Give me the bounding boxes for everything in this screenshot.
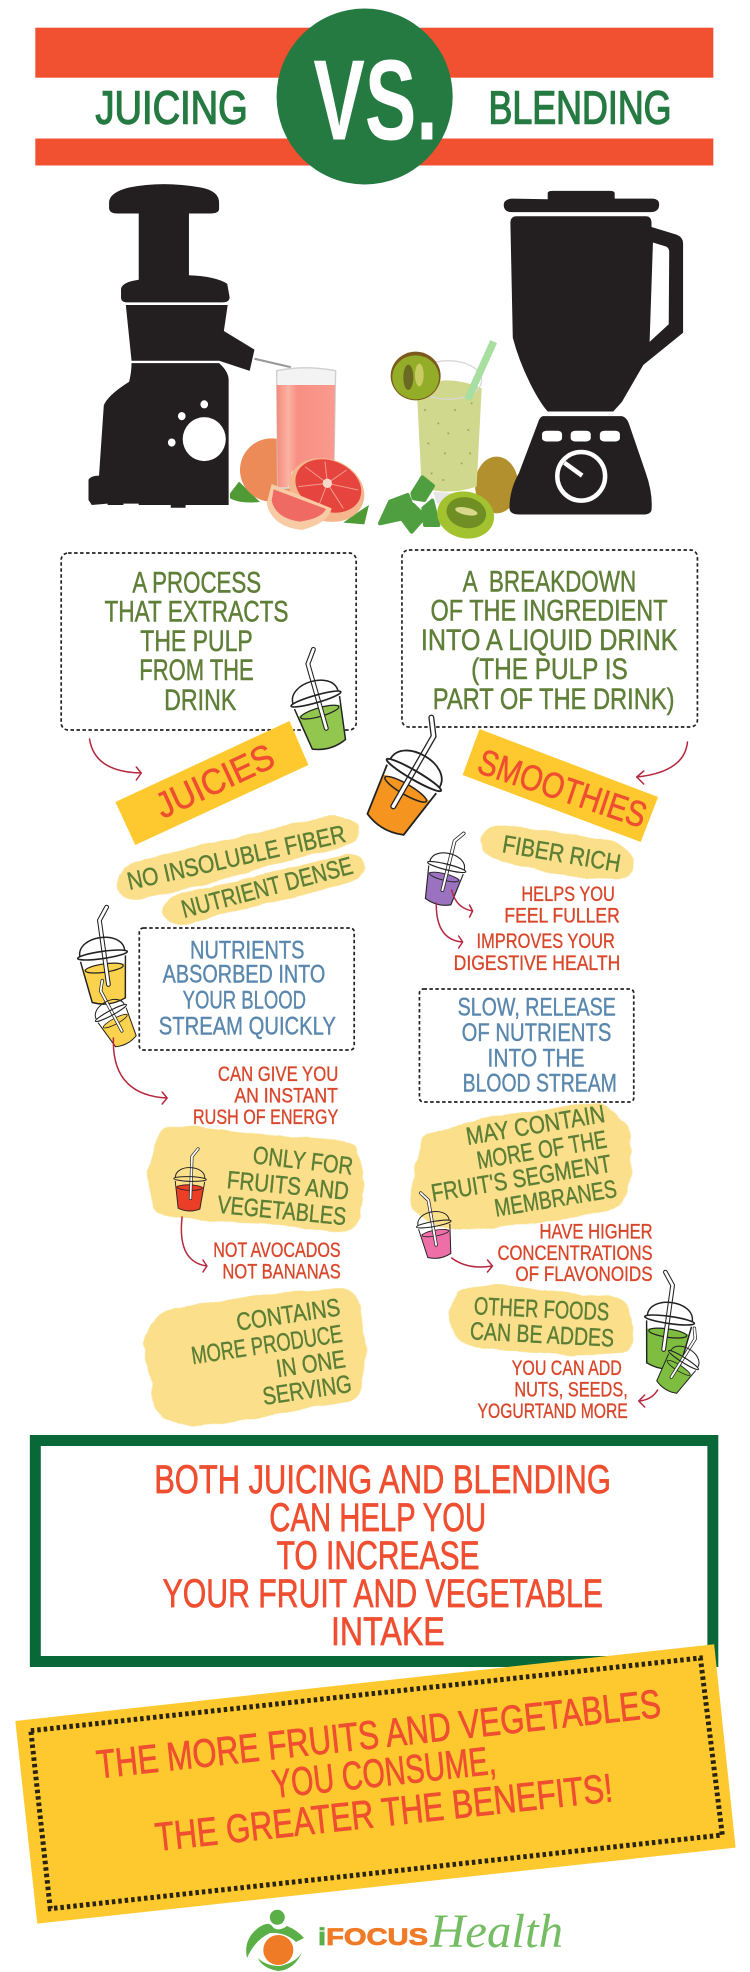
- instant energy note: RUSH OF ENERGY: [193, 1106, 338, 1129]
- definition text: PART OF THE DRINK): [433, 683, 675, 716]
- highlight: segment membranes: FRUIT'S SEGMENT: [429, 1150, 613, 1208]
- highlight: more produce in one serving: MORE PRODUCE: [189, 1320, 344, 1370]
- panel text: NUTRIENTS: [190, 936, 304, 964]
- blender lid: [504, 191, 659, 212]
- definition text: INTO A LIQUID DRINK: [421, 624, 678, 657]
- blender base: [509, 416, 652, 514]
- mint leaves: [380, 477, 438, 532]
- definition text: OF THE INGREDIENT: [430, 595, 668, 628]
- straw: [468, 342, 494, 399]
- dashed box: [402, 550, 697, 727]
- panel text: SLOW, RELEASE: [458, 994, 616, 1022]
- logo script: Health: [429, 1905, 563, 1958]
- arrow to flavonoids: [452, 1258, 492, 1272]
- icon: green cup: [278, 645, 355, 755]
- jar handle opening: [650, 243, 669, 342]
- blender jar: [510, 216, 683, 411]
- arrow to avocado note: [181, 1217, 207, 1272]
- juice glass: [277, 368, 336, 488]
- arrows from purple cup: [436, 890, 473, 948]
- highlight: only for fruits and vegetables: VEGETABLES: [216, 1191, 348, 1231]
- add-ins note: YOGURTAND MORE: [478, 1400, 628, 1423]
- juice drip line: [254, 359, 291, 367]
- panel: the more fruits and vegetables: [15, 1644, 736, 1924]
- highlight: segment membranes: MAY CONTAIN: [464, 1100, 607, 1151]
- highlight: only for fruits and vegetables: [151, 1127, 361, 1231]
- banner: smoothies: [463, 729, 658, 842]
- icon: pink cup: [411, 1189, 457, 1261]
- kiwi on glass rim: [391, 352, 441, 400]
- VS. heading: VS.: [313, 37, 438, 165]
- dotted border: [31, 1658, 722, 1909]
- panel text: INTO THE: [488, 1045, 585, 1073]
- blender buttons: [542, 431, 620, 442]
- highlight blobs: [117, 817, 365, 925]
- panel: both juicing and blending: [35, 1440, 713, 1662]
- arrow to smoothies: [637, 742, 687, 784]
- juicer dial and buttons: [168, 400, 226, 461]
- add-ins note: YOU CAN ADD: [512, 1357, 622, 1380]
- header banner: [35, 8, 713, 184]
- panel text: YOUR BLOOD: [183, 986, 306, 1014]
- definition text: THAT EXTRACTS: [104, 596, 289, 629]
- heading: blending: BLENDING: [488, 81, 672, 134]
- flavonoids note: OF FLAVONOIDS: [515, 1263, 653, 1286]
- panel text: TO INCREASE: [277, 1534, 480, 1578]
- arrow to instant energy: [113, 1038, 167, 1104]
- glass foot: [433, 492, 455, 505]
- highlight: only for fruits and vegetables: FRUITS AND: [226, 1166, 350, 1206]
- blender dial: [557, 452, 605, 501]
- panel text: OF NUTRIENTS: [462, 1019, 611, 1047]
- highlight: no insoluble fiber, nutrient dense: NUTRIENT DENSE: [178, 852, 356, 924]
- arrow to add-ins note: [639, 1390, 658, 1407]
- heading: juicing: JUICING: [96, 81, 248, 134]
- highlight: more produce in one serving: [146, 1290, 364, 1425]
- icon: yellow cups: [71, 905, 143, 1052]
- panel text: YOUR FRUIT AND VEGETABLE: [163, 1572, 603, 1616]
- icon: juicer silhouette: [88, 184, 291, 508]
- highlight: more produce in one serving: IN ONE: [274, 1345, 347, 1383]
- panel text: INTAKE: [331, 1610, 445, 1654]
- avocado and banana note: [213, 1239, 341, 1284]
- highlight: no insoluble fiber, nutrient dense: [117, 817, 365, 925]
- panel text: CAN HELP YOU: [269, 1496, 486, 1540]
- icon: red cup: [173, 1148, 207, 1212]
- definition text: DRINK: [164, 684, 236, 717]
- highlight text: NO INSOLUBLE FIBER: [125, 820, 348, 896]
- flavonoids note: HAVE HIGHER: [540, 1220, 653, 1243]
- instant energy note: AN INSTANT: [234, 1085, 338, 1108]
- avocado and banana note: NOT AVOCADOS: [213, 1239, 341, 1262]
- juicer base: [88, 363, 229, 508]
- definition text: THE PULP: [140, 625, 253, 658]
- arrow to juicies: [90, 739, 141, 780]
- panel text: ABSORBED INTO: [163, 960, 325, 988]
- highlight: other foods: CAN BE ADDES: [469, 1317, 615, 1353]
- highlight: more produce in one serving: SERVING: [261, 1370, 353, 1411]
- juicies label: JUICIES: [149, 736, 281, 826]
- icon: purple cup: [418, 827, 475, 909]
- highlight: other foods: OTHER FOODS: [473, 1292, 610, 1326]
- bottom orange bar: [35, 138, 713, 166]
- panel text: BLOOD STREAM: [463, 1070, 617, 1098]
- flavonoids note: [497, 1220, 653, 1286]
- green VS circle: [277, 8, 453, 184]
- add-ins note: [478, 1357, 628, 1423]
- logo mark: [246, 1910, 304, 1971]
- banner: juicies: [115, 721, 308, 845]
- smoothie: [417, 380, 482, 492]
- grapefruit half: [279, 447, 374, 533]
- whole grapefruit: [240, 438, 303, 502]
- smoothies label: SMOOTHIES: [473, 742, 652, 836]
- definition text: FROM THE: [139, 654, 254, 687]
- panel text: [159, 936, 336, 1040]
- photo: grapefruit juice and kiwi smoothie: [230, 342, 518, 544]
- instant energy note: [193, 1063, 338, 1129]
- highlight: segment membranes: MEMBRANES: [493, 1175, 619, 1223]
- icon: orange cup: [356, 709, 470, 844]
- leaves under grapefruit: [230, 482, 369, 524]
- panel: juicing definition: [61, 553, 356, 730]
- definition text: [104, 566, 289, 717]
- fiber rich benefits: HELPS YOU: [521, 883, 615, 906]
- logo: iFocus Health: [246, 1905, 563, 1971]
- panel text: [458, 994, 617, 1098]
- kiwi half: [433, 486, 499, 544]
- panel text: YOU CONSUME,: [270, 1739, 498, 1807]
- highlight: only for fruits and vegetables: ONLY FOR: [251, 1141, 354, 1181]
- panel text: [94, 1682, 663, 1860]
- fiber rich benefits: [454, 883, 620, 975]
- icon: green cups: [638, 1270, 716, 1399]
- highlight: more produce in one serving: CONTAINS: [235, 1293, 342, 1337]
- logo wordmark: iFOCUS: [318, 1924, 428, 1951]
- brown kiwi: [475, 457, 518, 513]
- fiber rich benefits: IMPROVES YOUR: [477, 930, 615, 953]
- definition text: [421, 566, 678, 716]
- panel: blending definition: [402, 550, 697, 727]
- grapefruit wedge: [267, 484, 332, 530]
- highlight: other foods: [450, 1287, 630, 1353]
- highlight: fiber rich: FIBER RICH: [500, 830, 623, 878]
- panel text: [154, 1458, 611, 1654]
- panel text: STREAM QUICKLY: [159, 1012, 336, 1040]
- add-ins note: NUTS, SEEDS,: [514, 1379, 628, 1402]
- fiber rich benefits: FEEL FULLER: [504, 905, 620, 928]
- juicer plunger and lid: [109, 184, 230, 302]
- top orange bar: [35, 28, 713, 78]
- avocado and banana note: NOT BANANAS: [222, 1261, 341, 1284]
- instant energy note: CAN GIVE YOU: [218, 1063, 338, 1086]
- highlight: segment membranes: MORE OF THE: [475, 1125, 609, 1175]
- panel: slow release of nutrients: [419, 989, 634, 1102]
- panel text: THE GREATER THE BENEFITS!: [153, 1766, 615, 1860]
- pink juice: [277, 385, 335, 487]
- flavonoids note: CONCENTRATIONS: [497, 1242, 653, 1265]
- dashed box: [61, 553, 356, 730]
- definition text: (THE PULP IS: [471, 653, 628, 686]
- juicer chamber and spout: [126, 305, 254, 371]
- panel text: BOTH JUICING AND BLENDING: [154, 1458, 611, 1502]
- fiber rich benefits: DIGESTIVE HEALTH: [454, 952, 620, 975]
- highlight: segment membranes: [414, 1100, 629, 1228]
- definition text: A PROCESS: [132, 566, 261, 599]
- panel: nutrients absorbed quickly: [139, 928, 354, 1050]
- icon: blender silhouette: [504, 191, 683, 514]
- definition text: A BREAKDOWN: [463, 566, 636, 599]
